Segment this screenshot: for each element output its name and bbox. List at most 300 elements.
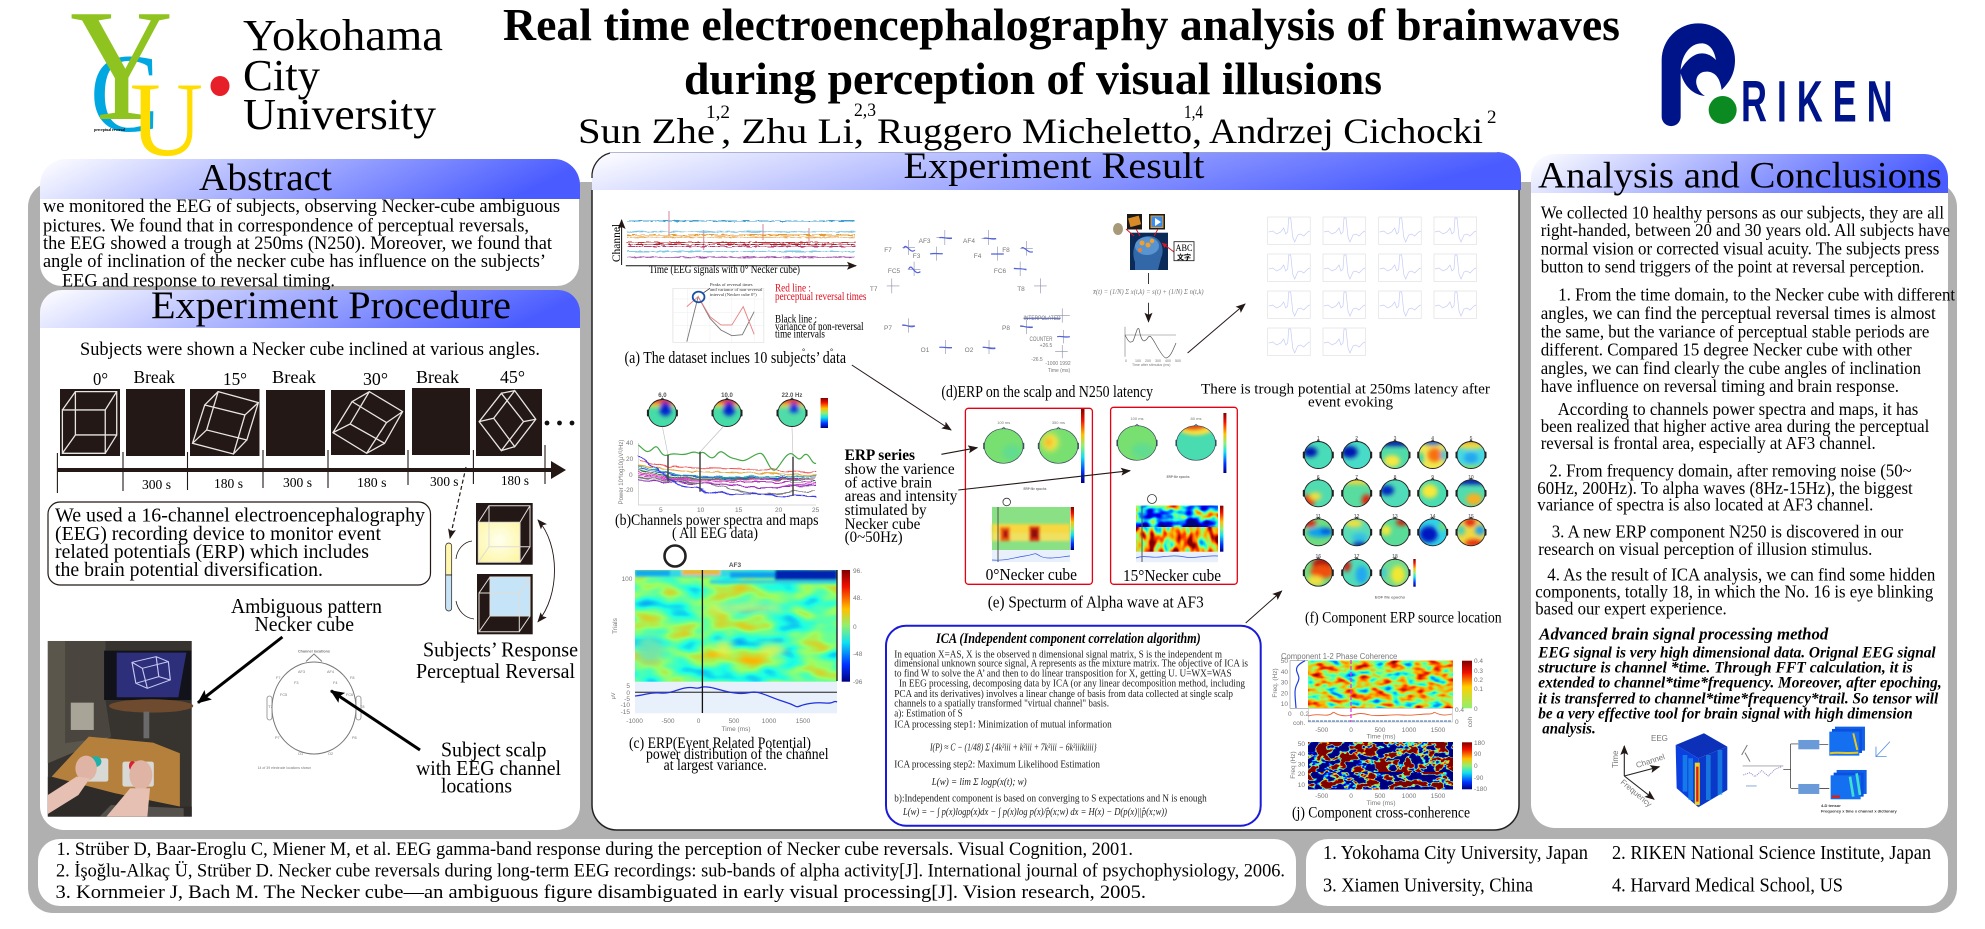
chart (j): cross coherence: 500	[1375, 793, 1386, 800]
chart (b): channel power spectra: 15	[735, 507, 743, 514]
diagram (d): stimulus icons and brain	[1113, 214, 1194, 270]
chart (d): scalp ERP layout: Time (ms)	[1048, 368, 1070, 374]
chart (j): phase coherence: coh	[1467, 716, 1474, 727]
chart (c): AF3 ERP image: 500	[729, 718, 740, 725]
note: trough potential: There is trough potential at 250ms latency after	[1201, 382, 1490, 398]
label: subject scalp: with EEG channel	[416, 756, 561, 780]
chart (j): phase coherence: 500	[1375, 727, 1386, 734]
panel: references: 3. Kornmeier J, Bach M. The Necker cube—an ambiguous figure disambiguated in early visual processing[J]. Vision research, 2005.	[56, 882, 1146, 903]
caption (c): (c) ERP(Event Related Potential)	[629, 735, 811, 752]
caption (b): ( All EEG data)	[672, 525, 758, 542]
arrow: brain down to equation	[1148, 273, 1150, 284]
callout: ICA algorithm	[886, 626, 1261, 826]
chart (f): component ERP source maps: 12	[1354, 514, 1360, 520]
caption (a): (a) The dataset inclues 10 subjects’ data	[624, 348, 846, 367]
chart (c): AF3 ERP image	[611, 546, 863, 733]
chart (j): phase coherence: 0.2	[1300, 711, 1309, 718]
callout: ICA algorithm: a): Estimation of S	[894, 709, 963, 720]
scalp channel location map: FC6	[346, 693, 353, 697]
caption (a): °	[830, 347, 833, 356]
panel: references: 2. İşoğlu-Alkaç Ü, Strüber D. Necker cube reversals during long-term EEG recordings: sub-bands of alpha activity[J]. International journal of psychophysiology, 2006.	[56, 861, 1285, 882]
chart (d): scalp ERP layout: O1	[921, 347, 930, 354]
panel: affiliations: 2. RIKEN National Science Institute, Japan	[1612, 842, 1931, 864]
chart (j): cross coherence: -180	[1474, 786, 1487, 793]
chart (c): AF3 ERP image: 96.	[853, 568, 862, 575]
chart (j): cross coherence: 10	[1298, 782, 1305, 789]
necker cube perceptual state: yellow	[476, 503, 533, 565]
chart (c): AF3 ERP image: -1000	[626, 718, 643, 725]
text: ERP series: stimulated by	[845, 502, 927, 519]
chart (d): scalp ERP layout: F8	[1002, 247, 1010, 254]
authors	[578, 100, 1496, 151]
callout: ICA algorithm: PCA and its derivatives) involves a linear change of basis from data collected at single scalp	[894, 689, 1233, 700]
legend: red and black lines	[775, 283, 867, 341]
scalp channel location map: O1	[298, 752, 303, 756]
stimulus sequence labels: Break	[272, 367, 316, 387]
stimulus sequence labels: 45°	[500, 367, 525, 387]
panel (e): 15 degree necker cube: ERP file epochs	[1167, 474, 1190, 479]
panel (e): 0 degree necker cube: 0°Necker cube	[986, 565, 1077, 584]
chart (j): cross coherence: 90	[1474, 751, 1482, 758]
chart (c): AF3 ERP image: 0	[697, 718, 701, 725]
chart (a): reversal times line chart	[673, 282, 764, 342]
callout: ICA algorithm: I(P) ≈ C − (1/48) Σ {4k²iii + k²iii + 7k²iii − 6k²iiikiiii}	[929, 743, 1097, 754]
chart (b): scalp maps: 6.0	[658, 393, 667, 399]
chart (d): N250 latency curve	[1125, 327, 1181, 367]
label: subject scalp: locations	[441, 774, 512, 798]
conclusions text: have influence on reversal timing and brain response.	[1541, 376, 1899, 396]
scalp channel location map	[258, 650, 364, 770]
panel (e): 0 degree necker cube: 100 ms	[997, 420, 1010, 425]
legend: red and black lines: Red line :	[775, 283, 811, 295]
text: advanced brain signal processing: be a very effective tool for brain signal with high dimension	[1538, 705, 1913, 722]
chart (j): phase coherence: 0.4	[1474, 658, 1483, 665]
grid: small ERP waveforms	[1268, 217, 1476, 356]
chart (c): AF3 ERP image: 1000	[762, 718, 777, 725]
chart (d): scalp ERP layout: COUNTER	[1030, 337, 1053, 343]
chart (f): component ERP source maps: 15	[1468, 514, 1474, 520]
response bar	[446, 541, 474, 619]
chart (j): phase coherence: 0	[1288, 711, 1292, 718]
panel (e): 15 degree necker cube: 100 ms	[1130, 416, 1144, 421]
conclusions text: different. Compared 15 degree Necker cube with other	[1541, 340, 1912, 360]
chart (d): scalp ERP layout: O2	[965, 347, 974, 354]
conclusions text: based our expert experience.	[1535, 598, 1727, 618]
label: ambiguous pattern: Ambiguous pattern	[231, 594, 382, 618]
dashed arrow to response bar	[450, 467, 466, 538]
chart (b): scalp maps	[647, 393, 828, 428]
chart (j): phase coherence: 0	[1349, 727, 1353, 734]
chart (a): EEG channel traces	[611, 211, 856, 276]
legend: red and black lines: variance of non-reversal	[775, 321, 864, 333]
chart (d): scalp ERP layout: P7	[884, 325, 892, 332]
abstract text: angle of inclination of the necker cube has influence on the subjects’	[43, 252, 546, 272]
label: ambiguous pattern	[231, 594, 382, 636]
diagram: EEG tensor: 4-D tensor	[1821, 803, 1841, 808]
chart (b): scalp maps: 22.0 Hz	[782, 393, 802, 399]
chart (c): AF3 ERP image: Time (ms)	[721, 726, 751, 733]
timeline arrow with durations: 300 s	[142, 478, 171, 493]
chart (c): AF3 ERP image: -10	[621, 702, 630, 709]
chart (d): scalp ERP layout: INTERPOLATED	[1024, 316, 1061, 322]
chart (j): phase coherence: 10	[1281, 701, 1288, 708]
abstract text: we monitored the EEG of subjects, observing Necker-cube ambiguous	[43, 197, 560, 217]
timeline arrow with durations	[57, 445, 566, 493]
chart (b): channel power spectra: 5	[659, 507, 663, 514]
chart (f): component ERP source maps: EOF file epochs	[1375, 594, 1406, 600]
chart (b): channel power spectra: Power 10*log10(μV²/Hz)	[619, 440, 625, 504]
authors: Andrzej Cichocki	[1209, 111, 1483, 151]
arrow to scalp map	[331, 691, 420, 750]
stimulus sequence labels: Break	[134, 367, 175, 387]
logo: RIKEN: RIKEN	[1741, 70, 1902, 135]
gray poster background	[28, 182, 1957, 913]
conclusions text: reversal is frontal area, especially at AF3 channel.	[1541, 433, 1876, 453]
chart (d): scalp ERP layout: FC6	[994, 268, 1007, 275]
scalp channel location map: 14 of 39 electrode locations shown	[258, 766, 311, 770]
chart (f): component ERP source maps: 3	[1394, 436, 1397, 442]
chart (f): component ERP source maps: 8	[1394, 475, 1397, 481]
diagram: EEG tensor: EEG	[1651, 734, 1668, 743]
callout: ICA algorithm: b):Independent component is based on converging to S expectations and N is enough	[894, 794, 1207, 805]
scalp channel location map: F8	[350, 676, 354, 680]
chart (j): cross coherence	[1290, 740, 1487, 807]
panel: affiliations: 3. Xiamen University, China	[1323, 875, 1533, 897]
scalp channel location map: P8	[352, 736, 357, 740]
authors: Ruggero Micheletto,	[877, 111, 1202, 151]
label: subject scalp: Subject scalp	[441, 738, 546, 762]
chart (b): channel power spectra	[619, 427, 820, 514]
photo: subject at monitor	[48, 641, 193, 817]
title: Real time electroencephalography analysis of brainwaves	[503, 0, 1620, 50]
chart (j): phase coherence: 1500	[1431, 727, 1446, 734]
logo: RIKEN	[1662, 23, 1902, 135]
text: ERP series	[845, 447, 958, 546]
chart (j): phase coherence: 40	[1281, 669, 1288, 676]
chart (d): N250 latency curve: 200	[1145, 359, 1151, 363]
diagram: EEG tensor: Time	[1611, 750, 1620, 768]
chart (f): component ERP source maps: 6	[1317, 475, 1320, 481]
conclusions text: research on visual perception of illusion stimulus.	[1538, 539, 1872, 559]
chart (j): phase coherence: 0.3	[1474, 668, 1483, 675]
text: advanced brain signal processing: Advanced brain signal processing method	[1538, 624, 1829, 643]
chart (d): scalp ERP layout: -26.5	[1031, 357, 1043, 363]
callout: ICA algorithm: In EEG processing, decomposing data by ICA (or any linear decomposition method, including	[899, 679, 1245, 690]
chart (j): phase coherence: 0.2	[1474, 677, 1483, 684]
chart (b): channel power spectra: 40	[626, 440, 634, 447]
chart (j): phase coherence: Time (ms)	[1366, 734, 1396, 740]
chart (c): AF3 ERP image: 1500	[796, 718, 811, 725]
title	[503, 0, 1620, 104]
diagram: EEG tensor: Channel	[1635, 752, 1666, 770]
logo: Yokohama City University: University	[243, 90, 436, 139]
logo: Yokohama City University: Yokohama	[243, 11, 443, 60]
chart (a): EEG channel traces: Time (EEG signals with 0° Necker cube)	[649, 262, 800, 276]
legend: red and black lines: time intervals	[775, 329, 825, 341]
authors: , Zhu Li,	[721, 111, 864, 151]
conclusions text: normal vision or corrected visual acuity. The subjects press	[1541, 238, 1939, 258]
conclusions text: According to channels power spectra and maps, it has	[1558, 399, 1918, 419]
chart (d): scalp ERP layout: T7	[870, 286, 878, 293]
label: subjects response: Perceptual Reversal	[416, 659, 575, 683]
timeline arrow with durations: 180 s	[501, 474, 529, 489]
timeline arrow with durations: 300 s	[283, 476, 312, 491]
chart (f): component ERP source maps: 1	[1317, 436, 1320, 442]
text: ERP series: areas and intensity	[845, 488, 958, 505]
callout: ICA algorithm: ICA processing step1: Minimization of mutual information	[894, 720, 1112, 731]
diagram (d): stimulus icons and brain: 文字	[1177, 252, 1191, 262]
heading: analysis and conclusions: Analysis and Conclusions	[1538, 155, 1942, 196]
arrow: ERP series to 0 degree maps	[941, 448, 977, 454]
logo: Yokohama City University: perceptual reversal	[94, 127, 126, 132]
chart (f): component ERP source maps: 9	[1431, 475, 1434, 481]
chart (j): phase coherence: 0.4	[1455, 707, 1464, 714]
conclusions text: 2. From frequency domain, after removing noise (50~	[1549, 461, 1912, 481]
authors: 1,4	[1184, 102, 1203, 123]
chart (d): scalp ERP layout: P8	[1002, 325, 1010, 332]
chart (j): cross coherence: 20	[1298, 771, 1305, 778]
diagram: EEG tensor: Frequency	[1619, 778, 1653, 809]
callout: EEG recording device: related potentials (ERP) which includes	[55, 542, 369, 563]
chart (j): phase coherence: Component 1-2 Phase Coherence	[1281, 652, 1398, 661]
caption (b)	[615, 512, 818, 542]
chart (d): scalp ERP layout: F4	[974, 253, 982, 260]
chart (d): scalp ERP layout: FC5	[888, 268, 901, 275]
chart (c): AF3 ERP image: -500	[661, 718, 675, 725]
scalp channel location map: F7	[276, 676, 280, 680]
chart (j): cross coherence: Freq (Hz)	[1290, 751, 1297, 779]
chart (a): EEG channel traces: Channel	[611, 224, 623, 262]
caption (c)	[629, 735, 829, 774]
conclusions text: 4. As the result of ICA analysis, we can find some hidden	[1547, 565, 1936, 585]
intro sentence: Subjects were shown a Necker cube inclined at various angles.	[80, 340, 540, 360]
chart (f): component ERP source maps: 2	[1355, 436, 1358, 442]
chart (c): AF3 ERP image: -15	[621, 709, 630, 716]
scalp channel location map: FC5	[280, 693, 287, 697]
chart (j): cross coherence: 40	[1298, 751, 1305, 758]
stimulus sequence: necker cubes and breaks	[60, 388, 574, 456]
chart (d): N250 latency curve: Time after stimulus (ms)	[1132, 363, 1170, 367]
logo: Yokohama City University: C	[90, 32, 159, 156]
chart (f): component ERP source maps: 17	[1354, 554, 1360, 560]
panel: experiment procedure	[40, 284, 580, 830]
chart (d): scalp ERP layout: -1000 1992	[1045, 361, 1071, 367]
conclusions text: right-handed, between 20 and 30 years old. All subjects have	[1541, 220, 1950, 240]
text: ERP series: of active brain	[845, 475, 932, 492]
timeline arrow with durations: 180 s	[357, 476, 386, 491]
label: subjects response	[416, 638, 578, 683]
necker cube perceptual state: blue	[477, 574, 533, 634]
caption (f): (f) Component ERP source location	[1305, 610, 1502, 627]
chart (c): AF3 ERP image: 0	[626, 690, 630, 697]
conclusions text: been realized that higher active area during the perceptual	[1541, 416, 1929, 436]
scalp channel location map: T7	[268, 705, 272, 709]
chart (b): channel power spectra: 10	[697, 507, 705, 514]
chart (c): AF3 ERP image: 48.	[853, 595, 862, 602]
caption (c): at largest variance.	[664, 757, 767, 774]
text: ERP series: show the varience	[845, 461, 955, 478]
stimulus sequence labels	[93, 367, 525, 389]
label: subject scalp	[416, 738, 561, 798]
authors: 2	[1487, 107, 1496, 128]
arrow: ICA to component maps	[1246, 591, 1282, 623]
timeline arrow with durations: 180 s	[214, 477, 243, 492]
callout: EEG recording device: the brain potential diversification.	[55, 560, 323, 581]
text: advanced brain signal processing: extended to channel*time*frequency. Moreover, after epoching,	[1538, 674, 1942, 691]
chart (b): channel power spectra: 0	[629, 472, 633, 479]
diagram: EEG tensor: Frequency x time x channel x dictionary	[1821, 808, 1897, 814]
arrow from dataset to ERP series	[852, 365, 951, 430]
chart (f): component ERP source maps: 16	[1316, 554, 1321, 560]
abstract text: the EEG showed a trough at 250ms (N250). Moreover, we found that	[43, 234, 553, 254]
chart (d): scalp ERP layout: AF3	[919, 238, 931, 245]
chart (f): component ERP source maps: 18	[1392, 554, 1398, 560]
chart (a): reversal times line chart: and variance of non-reversal	[710, 287, 763, 292]
conclusions text: components, totally 18, in which the No. 16 is eye blinking	[1535, 582, 1934, 602]
chart (d): scalp ERP layout: T8	[1017, 286, 1025, 293]
panel: references: 1. Strüber D, Baar-Eroglu C, Miener M, et al. EEG gamma-band response during the perception of Necker cube reversals. Visual Cognition, 2001.	[56, 839, 1133, 860]
chart (d): N250 latency curve: 100	[1135, 359, 1141, 363]
conclusions text: angles, we can find the perceptual reversal times is almost	[1541, 303, 1936, 323]
chart (j): cross coherence: -90	[1474, 775, 1484, 782]
chart (j): phase coherence: Freq. (Hz)	[1272, 668, 1279, 698]
chart (d): scalp ERP layout	[870, 230, 1071, 374]
arrow to photo	[198, 637, 282, 703]
chart (j): phase coherence: coh.	[1293, 720, 1305, 727]
chart (j): phase coherence	[1272, 652, 1483, 740]
stimulus sequence labels: 0°	[93, 369, 108, 389]
scalp channel location map: AF3	[298, 670, 305, 674]
chart (f): component ERP source maps: 11	[1316, 514, 1321, 520]
chart (f): component ERP source maps: 14	[1430, 514, 1436, 520]
caption (b): (b)Channels power spectra and maps	[615, 512, 818, 529]
chart (c): AF3 ERP image: 5	[626, 683, 630, 690]
chart (j): cross coherence: 1500	[1431, 793, 1446, 800]
chart (j): phase coherence: 0.1	[1474, 686, 1483, 693]
text: advanced brain signal processing: analysis.	[1542, 720, 1596, 737]
chart (j): phase coherence: 50	[1281, 658, 1288, 665]
chart (d): scalp ERP layout: F7	[884, 247, 892, 254]
chart (j): cross coherence: 50	[1298, 741, 1305, 748]
chart (c): AF3 ERP image: 100	[622, 576, 633, 583]
callout: EEG recording device: We used a 16-channel electroencephalography	[55, 506, 425, 526]
chart (f): component ERP source maps: 13	[1392, 514, 1398, 520]
chart (j): cross coherence: 1000	[1402, 793, 1417, 800]
chart (d): N250 latency curve: 400	[1165, 359, 1171, 363]
equation: averaged signal: x̄(t) = (1/N) Σ x(t,k) = s(t) + (1/N) Σ n(t,k)	[1092, 287, 1204, 296]
chart (b): scalp maps: 10.0	[721, 393, 733, 399]
note: trough potential: event evoking	[1308, 394, 1393, 410]
chart (b): channel power spectra: 20	[775, 507, 783, 514]
scalp channel location map: Channel locations	[298, 650, 330, 654]
caption (j): (j) Component cross-conherence	[1292, 805, 1470, 822]
scalp channel location map: F4	[333, 681, 337, 685]
text: advanced brain signal processing	[1537, 624, 1942, 737]
abstract text: EEG and response to reversal timing.	[62, 272, 335, 292]
chart (j): phase coherence: 1000	[1402, 727, 1417, 734]
caption (e): (e) Specturm of Alpha wave at AF3	[988, 592, 1204, 611]
text: ERP series: ERP series	[845, 447, 915, 464]
chart (d): N250 latency curve: 0	[1125, 359, 1127, 363]
legend: red and black lines: Black line :	[775, 314, 817, 326]
chart (a): reversal times line chart: Peaks of reversal times	[710, 282, 753, 287]
text: ERP series: Necker cube	[845, 516, 921, 533]
chart (j): phase coherence: 20	[1281, 690, 1288, 698]
label: subjects response: Subjects’ Response	[423, 638, 578, 662]
abstract text	[43, 197, 560, 292]
text: advanced brain signal processing: it is transferred to channel*time*frequency*trail. So tensor will	[1538, 690, 1939, 707]
callout: ICA algorithm: In equation X=AS, X is the observed n dimensional signal matrix, S is the independent m	[894, 650, 1222, 661]
scalp channel location map: P7	[275, 736, 280, 740]
panel (e): 0 degree necker cube	[965, 408, 1092, 584]
callout: ICA algorithm: dimensional unknown source signal, A represents as the mixture matrix. The objective of ICA is	[894, 659, 1248, 670]
callout: EEG recording device	[48, 502, 430, 585]
panel: analysis and conclusions	[1531, 154, 1955, 828]
chart (f): component ERP source maps: 5	[1470, 436, 1473, 442]
chart (d): N250 latency curve: 500	[1175, 359, 1181, 363]
panel (e): 15 degree necker cube: 15°Necker cube	[1123, 566, 1221, 585]
chart (c): AF3 ERP image: 0	[853, 624, 857, 631]
scalp channel location map: O2	[328, 752, 333, 756]
text: advanced brain signal processing: EEG signal is very high dimensional data. Orignal EEG signal	[1537, 644, 1936, 661]
panel (e): 0 degree necker cube: 350 ms	[1052, 420, 1065, 425]
caption (c): power distribution of the channel	[646, 746, 829, 763]
chart (j): cross coherence: Time (ms)	[1366, 800, 1396, 807]
authors: 1,2	[706, 102, 730, 123]
chart (j): cross coherence: 0	[1474, 763, 1478, 770]
scalp channel location map: AF4	[327, 670, 334, 674]
label: ambiguous pattern: Necker cube	[254, 612, 354, 636]
conclusions text: We collected 10 healthy persons as our subjects, they are all	[1541, 202, 1944, 222]
stimulus sequence labels: 30°	[363, 369, 388, 389]
arrow: ERP series to 15 degree maps	[958, 471, 1130, 490]
chart (b): channel power spectra: -20	[624, 487, 634, 494]
text: advanced brain signal processing: structure is channel *time. Through FFT calculation, it is	[1537, 659, 1913, 676]
chart (b): channel power spectra: 25	[812, 507, 820, 514]
panel (e): 15 degree necker cube	[1111, 407, 1237, 585]
conclusions text	[1535, 202, 1955, 618]
chart (j): cross coherence: 0	[1349, 793, 1353, 800]
callout: ICA algorithm: L(w) = − ∫ p(x)logp(x)dx − ∫ p(x)log p(x)/p̂(x;w) dx = H(x) − D(p(x)||p̂(x;w))	[902, 807, 1167, 818]
chart (j): cross coherence: 180	[1474, 740, 1485, 747]
panel: abstract	[40, 157, 580, 292]
chart (d): scalp ERP layout: F3	[913, 253, 921, 260]
callout: ICA algorithm: to find W to solve the A’ and then to do linear transposition for X, getting U. U=WX=WAS	[894, 669, 1232, 680]
heading: experiment procedure: Experiment Procedure	[151, 284, 511, 327]
timeline arrow with durations: 300 s	[430, 475, 458, 490]
chart (f): component ERP source maps	[1302, 436, 1486, 600]
chart (c): AF3 ERP image: AF3	[729, 562, 742, 569]
stimulus sequence labels: 15°	[223, 369, 247, 389]
conclusions text: 1. From the time domain, to the Necker cube with different	[1558, 285, 1955, 305]
diagram: EEG tensor	[1611, 727, 1897, 814]
chart (j): phase coherence: 30	[1281, 680, 1288, 686]
legend: red and black lines: perceptual reversal times	[775, 291, 867, 303]
arrow: equation to plot	[1148, 303, 1150, 322]
panel: affiliations: 1. Yokohama City University, Japan	[1323, 842, 1588, 864]
panel (e): 15 degree necker cube: 80 ms	[1191, 416, 1201, 421]
panel: affiliations	[1306, 839, 1948, 906]
authors: 2,3	[854, 100, 876, 121]
chart (c): AF3 ERP image: -5	[624, 696, 630, 703]
logo: Yokohama City University: U	[130, 61, 203, 178]
abstract text: pictures. We found that in correspondence of perceptual reversals,	[43, 216, 529, 236]
caption (a): °	[802, 347, 805, 356]
conclusions text: button to send triggers of the point at reversal perception.	[1541, 257, 1924, 277]
panel: references	[38, 839, 1296, 906]
panel: experiment result	[592, 146, 1521, 830]
conclusions text: angles, we can find clearly the cube angles of inclination	[1541, 358, 1921, 378]
